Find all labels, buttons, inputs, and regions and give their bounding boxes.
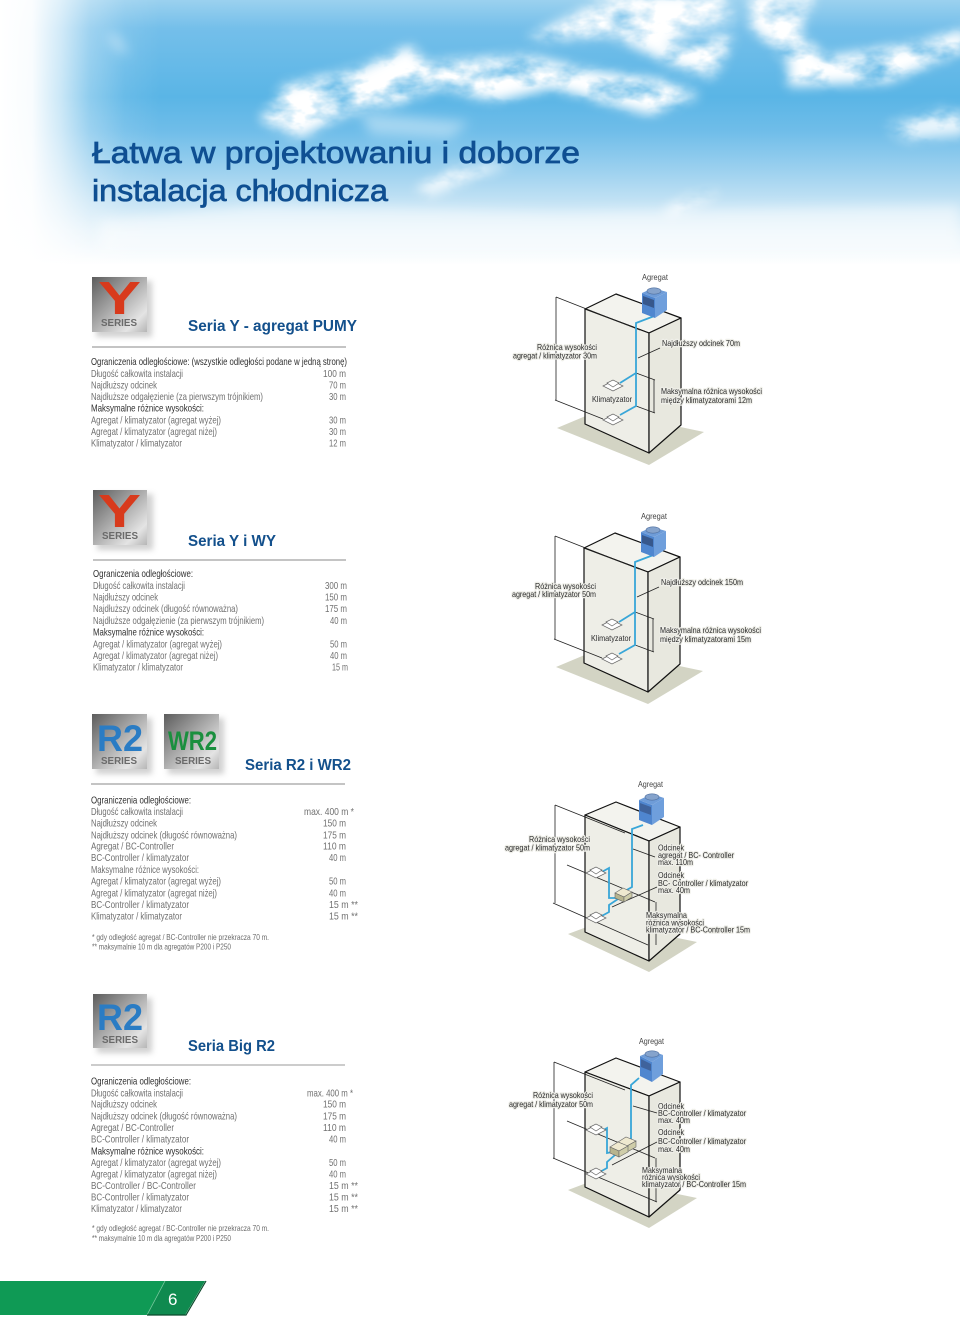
cloud: lower right wisp bbox=[662, 190, 722, 216]
labels: Maksymalna bbox=[642, 1165, 682, 1175]
distance limits list: Ograniczenia odległościowe: bbox=[91, 796, 191, 806]
diagram: Seria Big R2 building bbox=[509, 1036, 746, 1228]
labels: Klimatyzator bbox=[592, 394, 632, 404]
distance limits list bbox=[91, 1076, 358, 1215]
distance limits list: max. 400 m * bbox=[307, 1088, 353, 1100]
distance limits list: 15 m ** bbox=[329, 912, 358, 922]
distance limits list: Ograniczenia odległościowe: (wszystkie odległości podane w jedną stronę) bbox=[91, 357, 347, 368]
labels: agregat / klimatyzator 30m bbox=[513, 350, 597, 360]
logo: R2 series: R2 bbox=[97, 997, 143, 1038]
distance limits list: Maksymalne różnice wysokości: bbox=[91, 404, 204, 414]
panel: Seria R2 i WR2 bbox=[91, 714, 358, 952]
distance limits list: Maksymalne różnice wysokości: bbox=[91, 1146, 204, 1158]
distance limits list: Długość całkowita instalacji bbox=[93, 581, 185, 592]
distance limits list: 50 m bbox=[329, 1158, 346, 1169]
distance limits list: 150 m bbox=[325, 592, 347, 604]
distance limits list: Agregat / klimatyzator (agregat wyżej) bbox=[93, 640, 222, 650]
labels: Odcinek bbox=[658, 1101, 685, 1111]
icon: outdoor unit bbox=[640, 1051, 663, 1082]
icon: outdoor unit bbox=[642, 288, 667, 318]
distance limits list: 15 m ** bbox=[329, 1192, 358, 1204]
distance limits list bbox=[91, 796, 358, 922]
labels bbox=[512, 511, 761, 644]
distance limits list: Klimatyzator / klimatyzator bbox=[91, 912, 182, 922]
page number: 6 bbox=[168, 1290, 177, 1309]
labels: BC- Controller / klimatyzator bbox=[658, 878, 748, 888]
labels: max. 110m bbox=[658, 857, 693, 867]
distance limits list: 30 m bbox=[329, 427, 346, 438]
labels: agregat / BC- Controller bbox=[658, 850, 734, 860]
logo: WR2 series: WR2 bbox=[168, 726, 217, 756]
distance limits list: Agregat / klimatyzator (agregat niżej) bbox=[91, 888, 217, 900]
heading: Seria R2 i WR2 bbox=[245, 757, 351, 774]
distance limits list: Agregat / BC-Controller bbox=[91, 1123, 174, 1134]
labels: Agregat bbox=[639, 1036, 665, 1046]
labels: klimatyzator / BC-Controller 15m bbox=[646, 924, 750, 934]
distance limits list: Agregat / klimatyzator (agregat wyżej) bbox=[91, 876, 221, 888]
distance limits list: 110 m bbox=[323, 1123, 346, 1134]
heading: Seria Big R2 bbox=[188, 1038, 275, 1055]
logo: R2 series: SERIES bbox=[102, 1035, 138, 1046]
logo: Y series: Y bbox=[98, 485, 141, 537]
labels: między klimatyzatorami 12m bbox=[661, 395, 752, 405]
distance limits list: Najdłuższy odcinek (długość równoważna) bbox=[91, 830, 237, 842]
title bbox=[92, 135, 580, 208]
refrigerant pipes bbox=[598, 825, 643, 918]
distance limits list: 30 m bbox=[329, 392, 346, 403]
diagram: Seria Y i WY building bbox=[512, 511, 761, 704]
footer: green page-number band bbox=[0, 1281, 206, 1315]
footnotes bbox=[92, 1223, 269, 1243]
distance limits list: 110 m bbox=[323, 842, 346, 852]
labels: Maksymalna bbox=[646, 910, 687, 920]
labels: różnica wysokości bbox=[646, 918, 704, 928]
icon: outdoor unit bbox=[639, 794, 664, 825]
distance limits list: 70 m bbox=[329, 380, 346, 392]
distance limits list: Ograniczenia odległościowe: bbox=[91, 1076, 191, 1088]
distance limits list: Agregat / klimatyzator (agregat niżej) bbox=[91, 1170, 217, 1180]
labels: agregat / klimatyzator 50m bbox=[509, 1099, 593, 1109]
distance limits list: BC-Controller / klimatyzator bbox=[91, 853, 189, 864]
labels: BC-Controller / klimatyzator bbox=[658, 1108, 746, 1118]
distance limits list: BC-Controller / klimatyzator bbox=[91, 900, 189, 911]
distance limits list: 15 m ** bbox=[329, 1181, 358, 1192]
icon: indoor units bbox=[602, 619, 622, 664]
distance limits list: Najdłuższy odcinek bbox=[93, 592, 159, 604]
distance limits list: BC-Controller / BC-Controller bbox=[91, 1181, 196, 1192]
labels: różnica wysokości bbox=[642, 1172, 700, 1182]
distance limits list: 175 m bbox=[323, 1112, 346, 1122]
labels bbox=[509, 1036, 746, 1189]
title: instalacja chłodnicza bbox=[92, 173, 389, 208]
distance limits list: Najdłuższy odcinek bbox=[91, 1100, 158, 1110]
cloud: central band bbox=[260, 45, 700, 138]
distance limits list: Klimatyzator / klimatyzator bbox=[93, 662, 183, 674]
distance limits list: 150 m bbox=[323, 818, 346, 830]
labels: Agregat bbox=[638, 779, 664, 789]
distance limits list: 12 m bbox=[329, 438, 346, 450]
distance limits list: Ograniczenia odległościowe: bbox=[93, 569, 193, 580]
distance limits list: Agregat / klimatyzator (agregat wyżej) bbox=[91, 1158, 221, 1169]
logo: Y series: Y bbox=[98, 272, 141, 324]
distance limits list: 300 m bbox=[325, 581, 347, 592]
distance limits list: 100 m bbox=[323, 369, 346, 380]
labels: Maksymalna różnica wysokości bbox=[660, 625, 761, 635]
distance limits list: Agregat / BC-Controller bbox=[91, 842, 174, 852]
labels: Najdłuższy odcinek 70m bbox=[662, 338, 740, 348]
labels: Agregat bbox=[641, 511, 668, 521]
distance limits list: 15 m bbox=[332, 662, 348, 674]
distance limits list bbox=[93, 569, 348, 674]
labels: Różnica wysokości bbox=[535, 581, 596, 591]
heading: Seria Y i WY bbox=[188, 533, 276, 550]
cloud: far right bbox=[750, 0, 960, 86]
logo: R2 series bbox=[92, 714, 152, 774]
labels: Agregat bbox=[642, 272, 669, 282]
distance limits list: 150 m bbox=[323, 1100, 346, 1110]
labels: Odcinek bbox=[658, 870, 685, 880]
distance limits list: Agregat / klimatyzator (agregat wyżej) bbox=[91, 416, 221, 426]
labels: max. 40m bbox=[658, 885, 690, 895]
icon: BC controllers bbox=[610, 1137, 636, 1157]
distance limits list: Długość całkowita instalacji bbox=[91, 807, 183, 818]
panel: Seria Y - agregat PUMY bbox=[91, 272, 357, 450]
labels: między klimatyzatorami 15m bbox=[660, 634, 751, 644]
labels: Różnica wysokości bbox=[533, 1090, 593, 1100]
icon: BC controller bbox=[615, 888, 632, 902]
labels: Maksymalna różnica wysokości bbox=[661, 386, 762, 396]
labels bbox=[513, 272, 762, 405]
distance limits list: Agregat / klimatyzator (agregat niżej) bbox=[93, 651, 218, 662]
distance limits list: 175 m bbox=[323, 830, 346, 842]
distance limits list: Najdłuższy odcinek (długość równoważna) bbox=[93, 604, 238, 615]
distance limits list: Długość całkowita instalacji bbox=[91, 1088, 183, 1100]
distance limits list: 15 m ** bbox=[329, 900, 358, 911]
labels: klimatyzator / BC-Controller 15m bbox=[642, 1179, 746, 1189]
logo: R2 series bbox=[93, 994, 152, 1053]
logo: Y series: SERIES bbox=[101, 318, 137, 329]
labels: Klimatyzator bbox=[591, 633, 631, 643]
distance limits list: 50 m bbox=[330, 640, 347, 650]
footnotes: * gdy odległość agregat / BC-Controller nie przekracza 70 m. bbox=[92, 932, 269, 942]
cloud: low haze bbox=[100, 205, 960, 250]
labels bbox=[505, 779, 750, 934]
cloud: top right bbox=[527, 0, 735, 78]
distance limits list: 15 m ** bbox=[329, 1204, 358, 1215]
distance limits list: Klimatyzator / klimatyzator bbox=[91, 438, 182, 450]
footnotes bbox=[92, 932, 269, 952]
distance limits list: 175 m bbox=[325, 604, 347, 615]
logo: Y series: SERIES bbox=[102, 531, 138, 542]
labels: Najdłuższy odcinek 150m bbox=[661, 577, 743, 587]
distance limits list: 40 m bbox=[330, 651, 347, 662]
logo: Y series bbox=[92, 272, 152, 337]
labels: Różnica wysokości bbox=[537, 342, 597, 352]
distance limits list: Najdłuższy odcinek bbox=[91, 380, 158, 392]
distance limits list: 40 m bbox=[330, 616, 347, 627]
heading: Seria Y - agregat PUMY bbox=[188, 318, 357, 335]
logo: Y series bbox=[93, 485, 153, 550]
distance limits list: 40 m bbox=[329, 1170, 346, 1180]
distance limits list bbox=[91, 357, 347, 450]
cloud: small left bbox=[106, 33, 130, 55]
distance limits list: Długość całkowita instalacji bbox=[91, 369, 183, 380]
refrigerant pipes bbox=[598, 1078, 639, 1173]
distance limits list: BC-Controller / klimatyzator bbox=[91, 1134, 189, 1146]
labels: BC-Controller / klimatyzator bbox=[658, 1136, 746, 1146]
labels: agregat / klimatyzator 50m bbox=[505, 842, 590, 852]
distance limits list: Najdłuższy odcinek (długość równoważna) bbox=[91, 1112, 237, 1122]
distance limits list: 40 m bbox=[329, 1134, 346, 1146]
cloud: wisp under main band bbox=[360, 112, 470, 138]
left white fade bbox=[0, 0, 160, 285]
panel: Seria Big R2 bbox=[91, 994, 358, 1243]
logo: R2 series: SERIES bbox=[101, 756, 137, 767]
labels: Odcinek bbox=[658, 1127, 685, 1137]
distance limits list: Najdłuższy odcinek bbox=[91, 818, 158, 830]
footnotes: ** maksymalnie 10 m dla agregatów P200 i P250 bbox=[92, 942, 231, 952]
footnotes: * gdy odległość agregat / BC-Controller nie przekracza 70 m. bbox=[92, 1223, 269, 1233]
footnotes: ** maksymalnie 10 m dla agregatów P200 i P250 bbox=[92, 1233, 231, 1243]
distance limits list: 30 m bbox=[329, 416, 346, 426]
distance limits list: 40 m bbox=[329, 853, 346, 864]
labels: Różnica wysokości bbox=[529, 834, 590, 844]
labels: max. 40m bbox=[658, 1115, 690, 1125]
icon: indoor units bbox=[586, 867, 606, 923]
title: Łatwa w projektowaniu i doborze bbox=[92, 135, 580, 170]
refrigerant pipes bbox=[620, 315, 657, 415]
icon: indoor units bbox=[586, 1124, 606, 1179]
distance limits list: Klimatyzator / klimatyzator bbox=[91, 1204, 182, 1215]
distance limits list: Najdłuższe odgałęzienie (za pierwszym trójnikiem) bbox=[93, 616, 264, 627]
labels: max. 40m bbox=[658, 1144, 690, 1154]
distance limits list: 40 m bbox=[329, 888, 346, 900]
icon: outdoor unit bbox=[641, 527, 666, 557]
diagram: Seria R2 i WR2 building bbox=[505, 779, 750, 972]
diagram: Seria Y - agregat PUMY building bbox=[513, 272, 762, 465]
distance limits list: Maksymalne różnice wysokości: bbox=[93, 628, 204, 638]
refrigerant pipes bbox=[619, 554, 656, 654]
labels: Odcinek bbox=[658, 842, 685, 852]
logo: WR2 series bbox=[164, 714, 224, 774]
logo: WR2 series: SERIES bbox=[175, 756, 211, 767]
panel: Seria Y i WY bbox=[93, 485, 348, 674]
distance limits list: max. 400 m * bbox=[304, 807, 354, 818]
labels: agregat / klimatyzator 50m bbox=[512, 589, 596, 599]
distance limits list: Najdłuższe odgałęzienie (za pierwszym trójnikiem) bbox=[91, 392, 263, 403]
sky background with clouds bbox=[0, 0, 960, 285]
distance limits list: Agregat / klimatyzator (agregat niżej) bbox=[91, 427, 217, 438]
distance limits list: BC-Controller / klimatyzator bbox=[91, 1192, 189, 1204]
cloud: wisp near title bbox=[415, 162, 515, 196]
distance limits list: Maksymalne różnice wysokości: bbox=[91, 865, 199, 876]
distance limits list: 50 m bbox=[329, 876, 346, 888]
cloud: small right bbox=[885, 108, 960, 140]
icon: indoor units bbox=[603, 380, 623, 425]
logo: R2 series: R2 bbox=[97, 718, 143, 759]
